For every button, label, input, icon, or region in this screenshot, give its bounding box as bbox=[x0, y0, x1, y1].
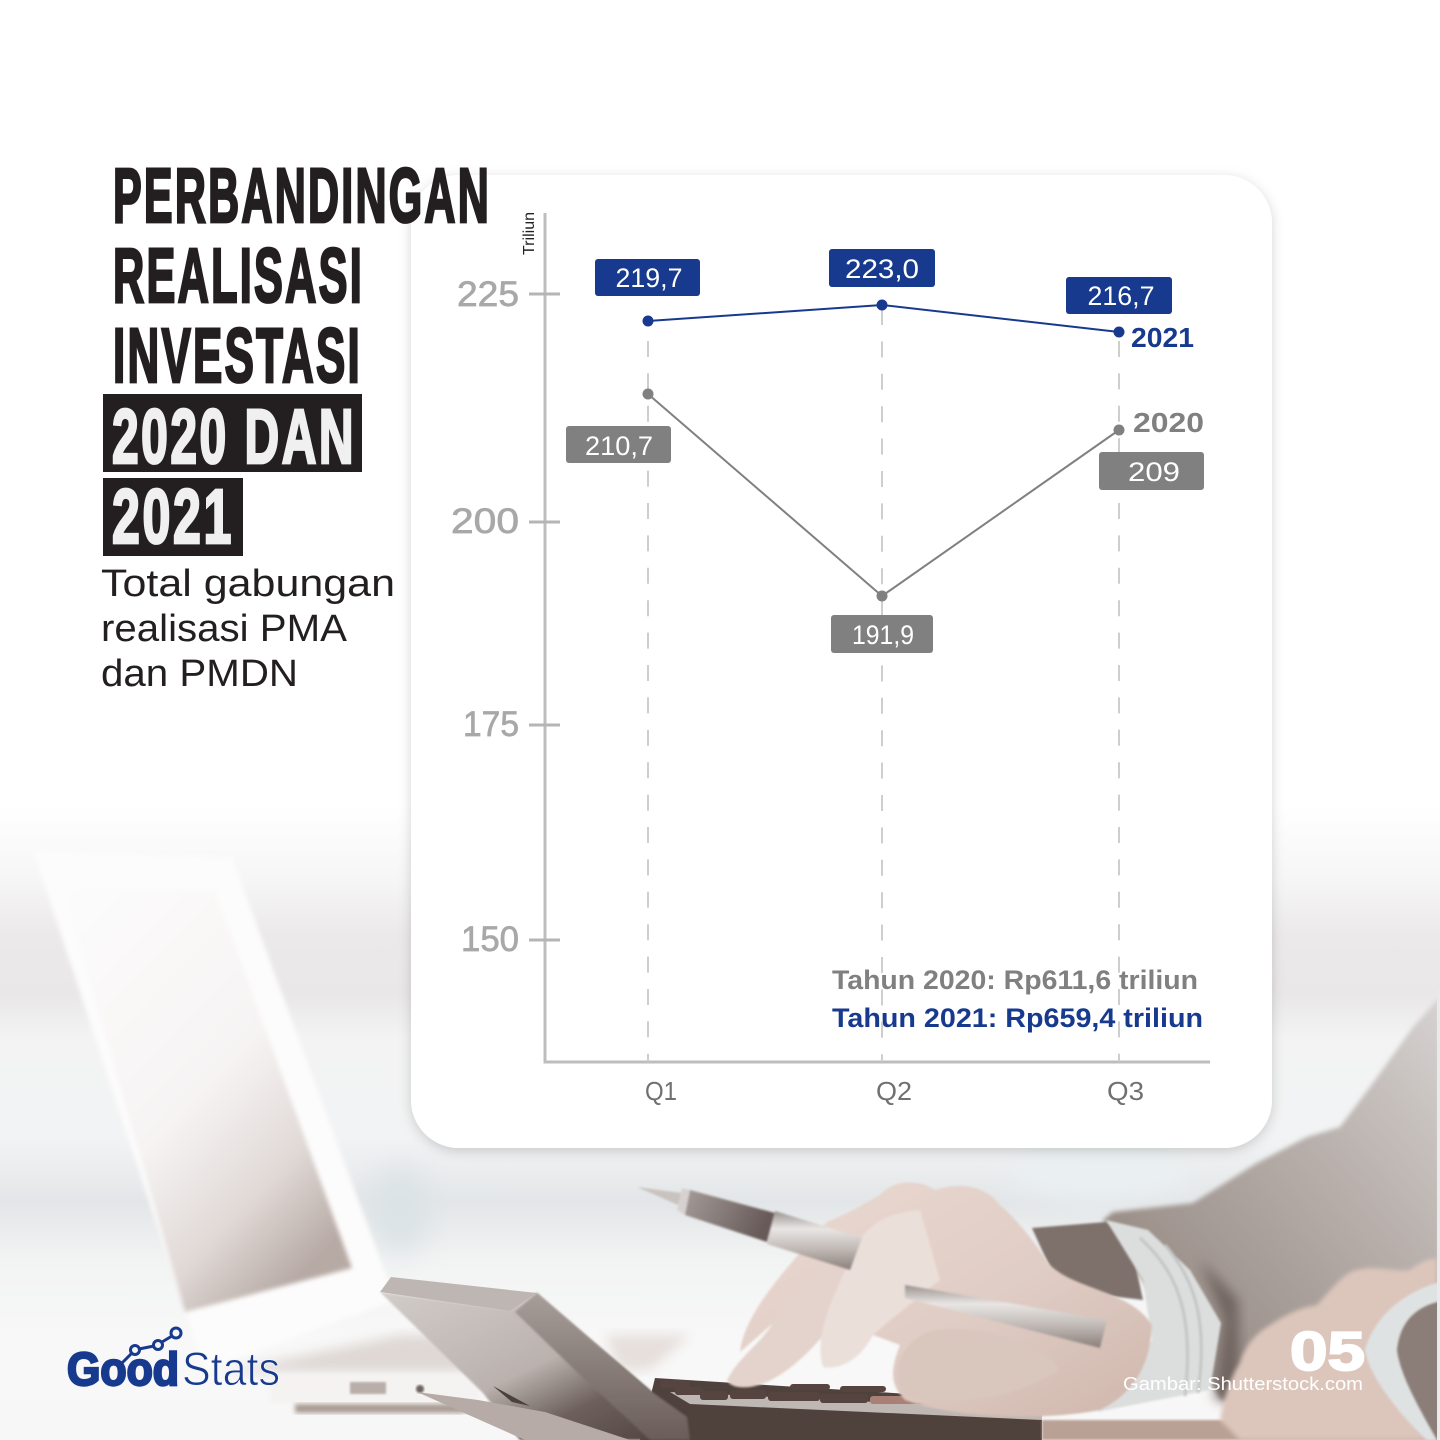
value label 210,7 bbox=[566, 426, 671, 463]
subtitle: realisasi PMA bbox=[101, 608, 348, 650]
panel: chart card bbox=[411, 175, 1272, 1148]
logo icon: trend line bbox=[122, 1328, 181, 1363]
title: 2020 DAN bbox=[112, 394, 356, 480]
y-axis ticks and labels: 225 bbox=[457, 275, 519, 314]
yearly total 2020: Tahun 2020: Rp611,6 triliun bbox=[832, 965, 1198, 995]
value label 223,0 bbox=[829, 249, 935, 287]
value label 219,7: 219,7 bbox=[616, 263, 682, 293]
value label 209: 209 bbox=[1128, 457, 1180, 487]
value label 223,0: 223,0 bbox=[845, 254, 919, 284]
line series 2020 bbox=[642, 388, 1124, 602]
title: INVESTASI bbox=[113, 313, 362, 399]
title: REALISASI bbox=[113, 233, 364, 319]
subtitle bbox=[101, 563, 395, 695]
y-axis ticks and labels: 175 bbox=[463, 705, 519, 744]
x-axis labels: Q3 bbox=[1107, 1076, 1144, 1106]
title bbox=[103, 153, 491, 560]
x-axis labels: Q1 bbox=[645, 1076, 677, 1106]
right-hand shirt cuff bbox=[1097, 1220, 1221, 1412]
x-axis labels bbox=[645, 1076, 1144, 1106]
laptop bbox=[33, 850, 690, 1413]
title: 2021 bbox=[112, 474, 234, 560]
desk bbox=[1042, 1420, 1440, 1440]
jacket sleeve bbox=[1103, 1000, 1440, 1400]
yearly total 2021: Tahun 2021: Rp659,4 triliun bbox=[832, 1003, 1203, 1033]
line series 2021 bbox=[642, 300, 1124, 338]
image credit: Gambar: Shutterstock.com bbox=[1123, 1374, 1363, 1394]
pen bbox=[637, 1187, 1107, 1348]
hand on calculator bbox=[727, 1182, 1152, 1417]
y-axis ticks and labels: 200 bbox=[451, 502, 519, 541]
calculator bbox=[380, 1277, 1042, 1440]
page number: 05 bbox=[1290, 1320, 1365, 1382]
series label 2021: 2021 bbox=[1131, 322, 1194, 353]
value label 216,7 bbox=[1066, 277, 1172, 314]
subtitle: dan PMDN bbox=[101, 653, 298, 695]
value label 209 bbox=[1099, 452, 1204, 490]
series label 2020: 2020 bbox=[1133, 407, 1204, 438]
title: PERBANDINGAN bbox=[113, 153, 491, 239]
axes bbox=[545, 213, 1210, 1062]
value label 219,7 bbox=[595, 259, 700, 296]
left hand and cuff bbox=[1220, 1258, 1440, 1440]
value label 216,7: 216,7 bbox=[1088, 281, 1154, 311]
y-axis unit label: Triliun bbox=[521, 212, 538, 255]
value label 191,9: 191,9 bbox=[852, 620, 914, 650]
y-axis ticks and labels bbox=[451, 275, 560, 959]
logo: GoodStats bbox=[67, 1328, 280, 1395]
value label 191,9 bbox=[831, 615, 933, 653]
subtitle: Total gabungan bbox=[101, 563, 395, 605]
logo: GoodStats: Stats bbox=[182, 1342, 280, 1395]
quarter guide lines bbox=[648, 309, 1119, 1062]
y-axis ticks and labels: 150 bbox=[461, 920, 519, 959]
logo: GoodStats: Good bbox=[67, 1343, 179, 1395]
value label 210,7: 210,7 bbox=[585, 431, 653, 461]
x-axis labels: Q2 bbox=[876, 1076, 912, 1106]
